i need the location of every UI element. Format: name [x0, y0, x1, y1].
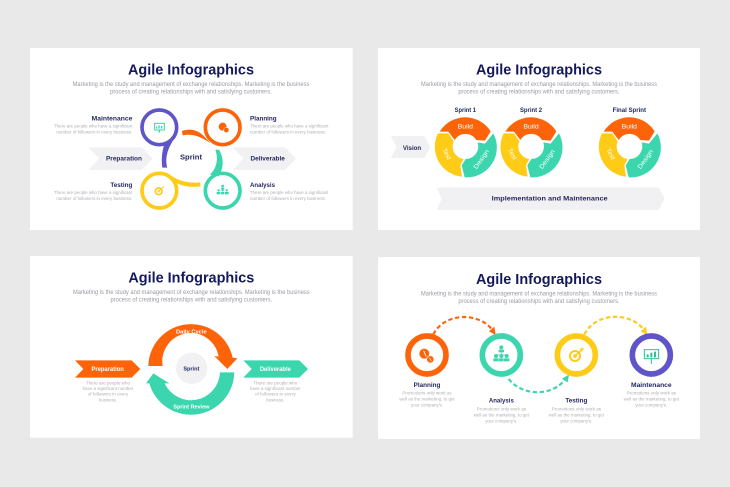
icon: org chart	[493, 345, 509, 361]
sprint centre: Sprint	[183, 366, 199, 372]
arrow: deliverable	[233, 147, 296, 170]
ring: planning	[182, 110, 240, 145]
text: maintenance: Maintenance	[631, 383, 672, 389]
ring: testing	[557, 336, 595, 374]
text: testing: your company's.	[560, 418, 592, 423]
text: planning: your company's.	[411, 402, 443, 407]
text: planning: There are people who have a significant	[250, 123, 329, 128]
donut: sprint 2	[500, 108, 563, 177]
subtitle: process of creating relationships with and satisfying customers.	[458, 299, 620, 305]
text: testing: Promotions only work as	[552, 407, 602, 412]
ring: testing	[142, 173, 200, 208]
arrow: dashed orange	[433, 317, 496, 335]
text: planning: number of followers in every business.	[250, 129, 326, 134]
text: analysis: well as the marketing, to get	[474, 412, 530, 417]
subtitle: process of creating relationships with and satisfying customers.	[110, 89, 272, 95]
text: testing: Testing	[110, 183, 133, 189]
title: Agile Infographics	[476, 63, 602, 79]
text: preparation: business.	[99, 397, 117, 402]
arrow: preparation: Preparation	[91, 367, 124, 373]
text: analysis	[474, 399, 530, 423]
icon: presentation board	[644, 350, 659, 364]
icon: target	[570, 348, 584, 361]
text: preparation: of followers in every	[88, 392, 129, 397]
donut: sprint 2: Sprint 2	[520, 108, 543, 114]
arrow: preparation	[88, 147, 153, 170]
text: analysis: Analysis	[250, 183, 276, 189]
icon: planning coins	[419, 349, 434, 363]
panel: process timeline	[378, 257, 700, 439]
subtitle	[421, 291, 657, 305]
ring: analysis	[205, 150, 240, 208]
arrow: preparation: Preparation	[106, 156, 142, 162]
arrow: deliverable	[243, 360, 308, 378]
text: analysis	[250, 183, 329, 201]
text: analysis: number of followers in every business.	[250, 196, 326, 201]
text: preparation: have a significant number	[83, 386, 134, 391]
donut: final sprint	[599, 108, 661, 177]
text: planning: Promotions only work as	[402, 391, 452, 396]
label: sprint centre: Sprint	[180, 153, 202, 162]
text: planning	[399, 383, 455, 407]
arrow: implementation and maintenance: Implementation and Maintenance	[492, 196, 608, 202]
text: planning: Planning	[250, 116, 277, 122]
arrow: implementation and maintenance	[437, 187, 665, 210]
donut: sprint 1	[435, 108, 497, 177]
ring: analysis	[482, 336, 520, 374]
donut: sprint 1: Build	[458, 123, 474, 130]
arrow: dashed green	[509, 375, 569, 392]
donut: final sprint: Final Sprint	[613, 108, 646, 114]
text: preparation	[83, 381, 134, 402]
donut: sprint 1: Design	[473, 148, 491, 171]
subtitle	[73, 290, 310, 303]
arrow: preparation	[75, 360, 140, 378]
arrow: deliverable: Deliverable	[260, 367, 291, 373]
sprint centre	[176, 353, 207, 384]
subtitle: process of creating relationships with and satisfying customers.	[458, 89, 620, 95]
arrow: dashed yellow	[584, 317, 647, 335]
donut: sprint 1: Sprint 1	[455, 108, 477, 114]
text: deliverable: There are people who	[253, 381, 298, 386]
subtitle	[421, 82, 657, 95]
subtitle	[73, 82, 309, 95]
arrow: sprint review	[146, 372, 234, 415]
donut: sprint 2: Build	[523, 123, 539, 130]
subtitle: Marketing is the study and management of exchange relationships. Marketing is the business	[73, 290, 310, 296]
donut: final sprint: Build	[622, 123, 638, 130]
text: maintenance: Promotions only work as	[627, 391, 677, 396]
panel: sprint donuts	[378, 48, 700, 230]
text: analysis: There are people who have a significant	[250, 190, 329, 195]
donut: final sprint: Design	[637, 148, 655, 171]
panel: daily cycle	[30, 256, 353, 438]
subtitle: Marketing is the study and management of exchange relationships. Marketing is the business	[421, 291, 657, 297]
text: maintenance: number of followers in every business.	[56, 129, 132, 134]
donut: final sprint: Test	[604, 147, 616, 161]
text: planning: Planning	[414, 383, 441, 389]
icon: presentation board	[155, 123, 164, 133]
title: Agile Infographics	[476, 272, 602, 288]
text: testing	[549, 399, 605, 423]
text: analysis: Analysis	[489, 399, 515, 405]
text: deliverable: business.	[266, 397, 284, 402]
ring: maintenance	[142, 110, 177, 168]
donut: sprint 2: Test	[506, 147, 518, 161]
arrow: vision	[391, 136, 430, 158]
arrow: vision: Vision	[403, 146, 422, 152]
text: maintenance: well as the marketing, to get	[624, 396, 680, 401]
arrow: daily cycle	[148, 324, 237, 369]
ring: maintenance	[632, 336, 670, 374]
text: maintenance	[624, 383, 680, 407]
panel: sprint loop	[30, 48, 353, 230]
donut: sprint 2: Design	[538, 148, 557, 171]
text: maintenance: There are people who have a significant	[54, 123, 133, 128]
text: maintenance	[54, 116, 133, 134]
text: maintenance: Maintenance	[92, 116, 133, 122]
arrow: deliverable: Deliverable	[250, 156, 286, 162]
text: deliverable: of followers in every	[255, 392, 296, 397]
text: testing	[54, 183, 133, 201]
text: testing: number of followers in every business.	[56, 196, 132, 201]
text: planning: well as the marketing, to get	[399, 396, 455, 401]
icon: target	[155, 186, 164, 195]
text: deliverable: have a significant number	[250, 386, 301, 391]
title: Agile Infographics	[128, 63, 254, 79]
subtitle: Marketing is the study and management of exchange relationships. Marketing is the business	[421, 82, 657, 88]
text: testing: well as the marketing, to get	[549, 412, 605, 417]
text: analysis: your company's.	[485, 418, 517, 423]
ring: planning	[408, 336, 446, 374]
arrow: sprint review: Sprint Review	[173, 405, 210, 411]
text: analysis: Promotions only work as	[477, 407, 527, 412]
text: preparation: There are people who	[86, 381, 130, 386]
text: maintenance: your company's.	[635, 402, 667, 407]
text: planning	[250, 116, 329, 134]
subtitle: Marketing is the study and management of exchange relationships. Marketing is the business	[73, 82, 309, 88]
icon: org chart	[217, 185, 229, 194]
donut: sprint 1: Test	[440, 147, 452, 161]
arrow: daily cycle: Daily Cycle	[176, 329, 207, 335]
text: testing: Testing	[565, 399, 588, 405]
text: testing: There are people who have a significant	[54, 190, 133, 195]
icon: planning coins	[219, 123, 229, 133]
title: Agile Infographics	[128, 271, 254, 287]
text: deliverable	[250, 381, 301, 402]
subtitle: process of creating relationships with and satisfying customers.	[110, 297, 272, 303]
